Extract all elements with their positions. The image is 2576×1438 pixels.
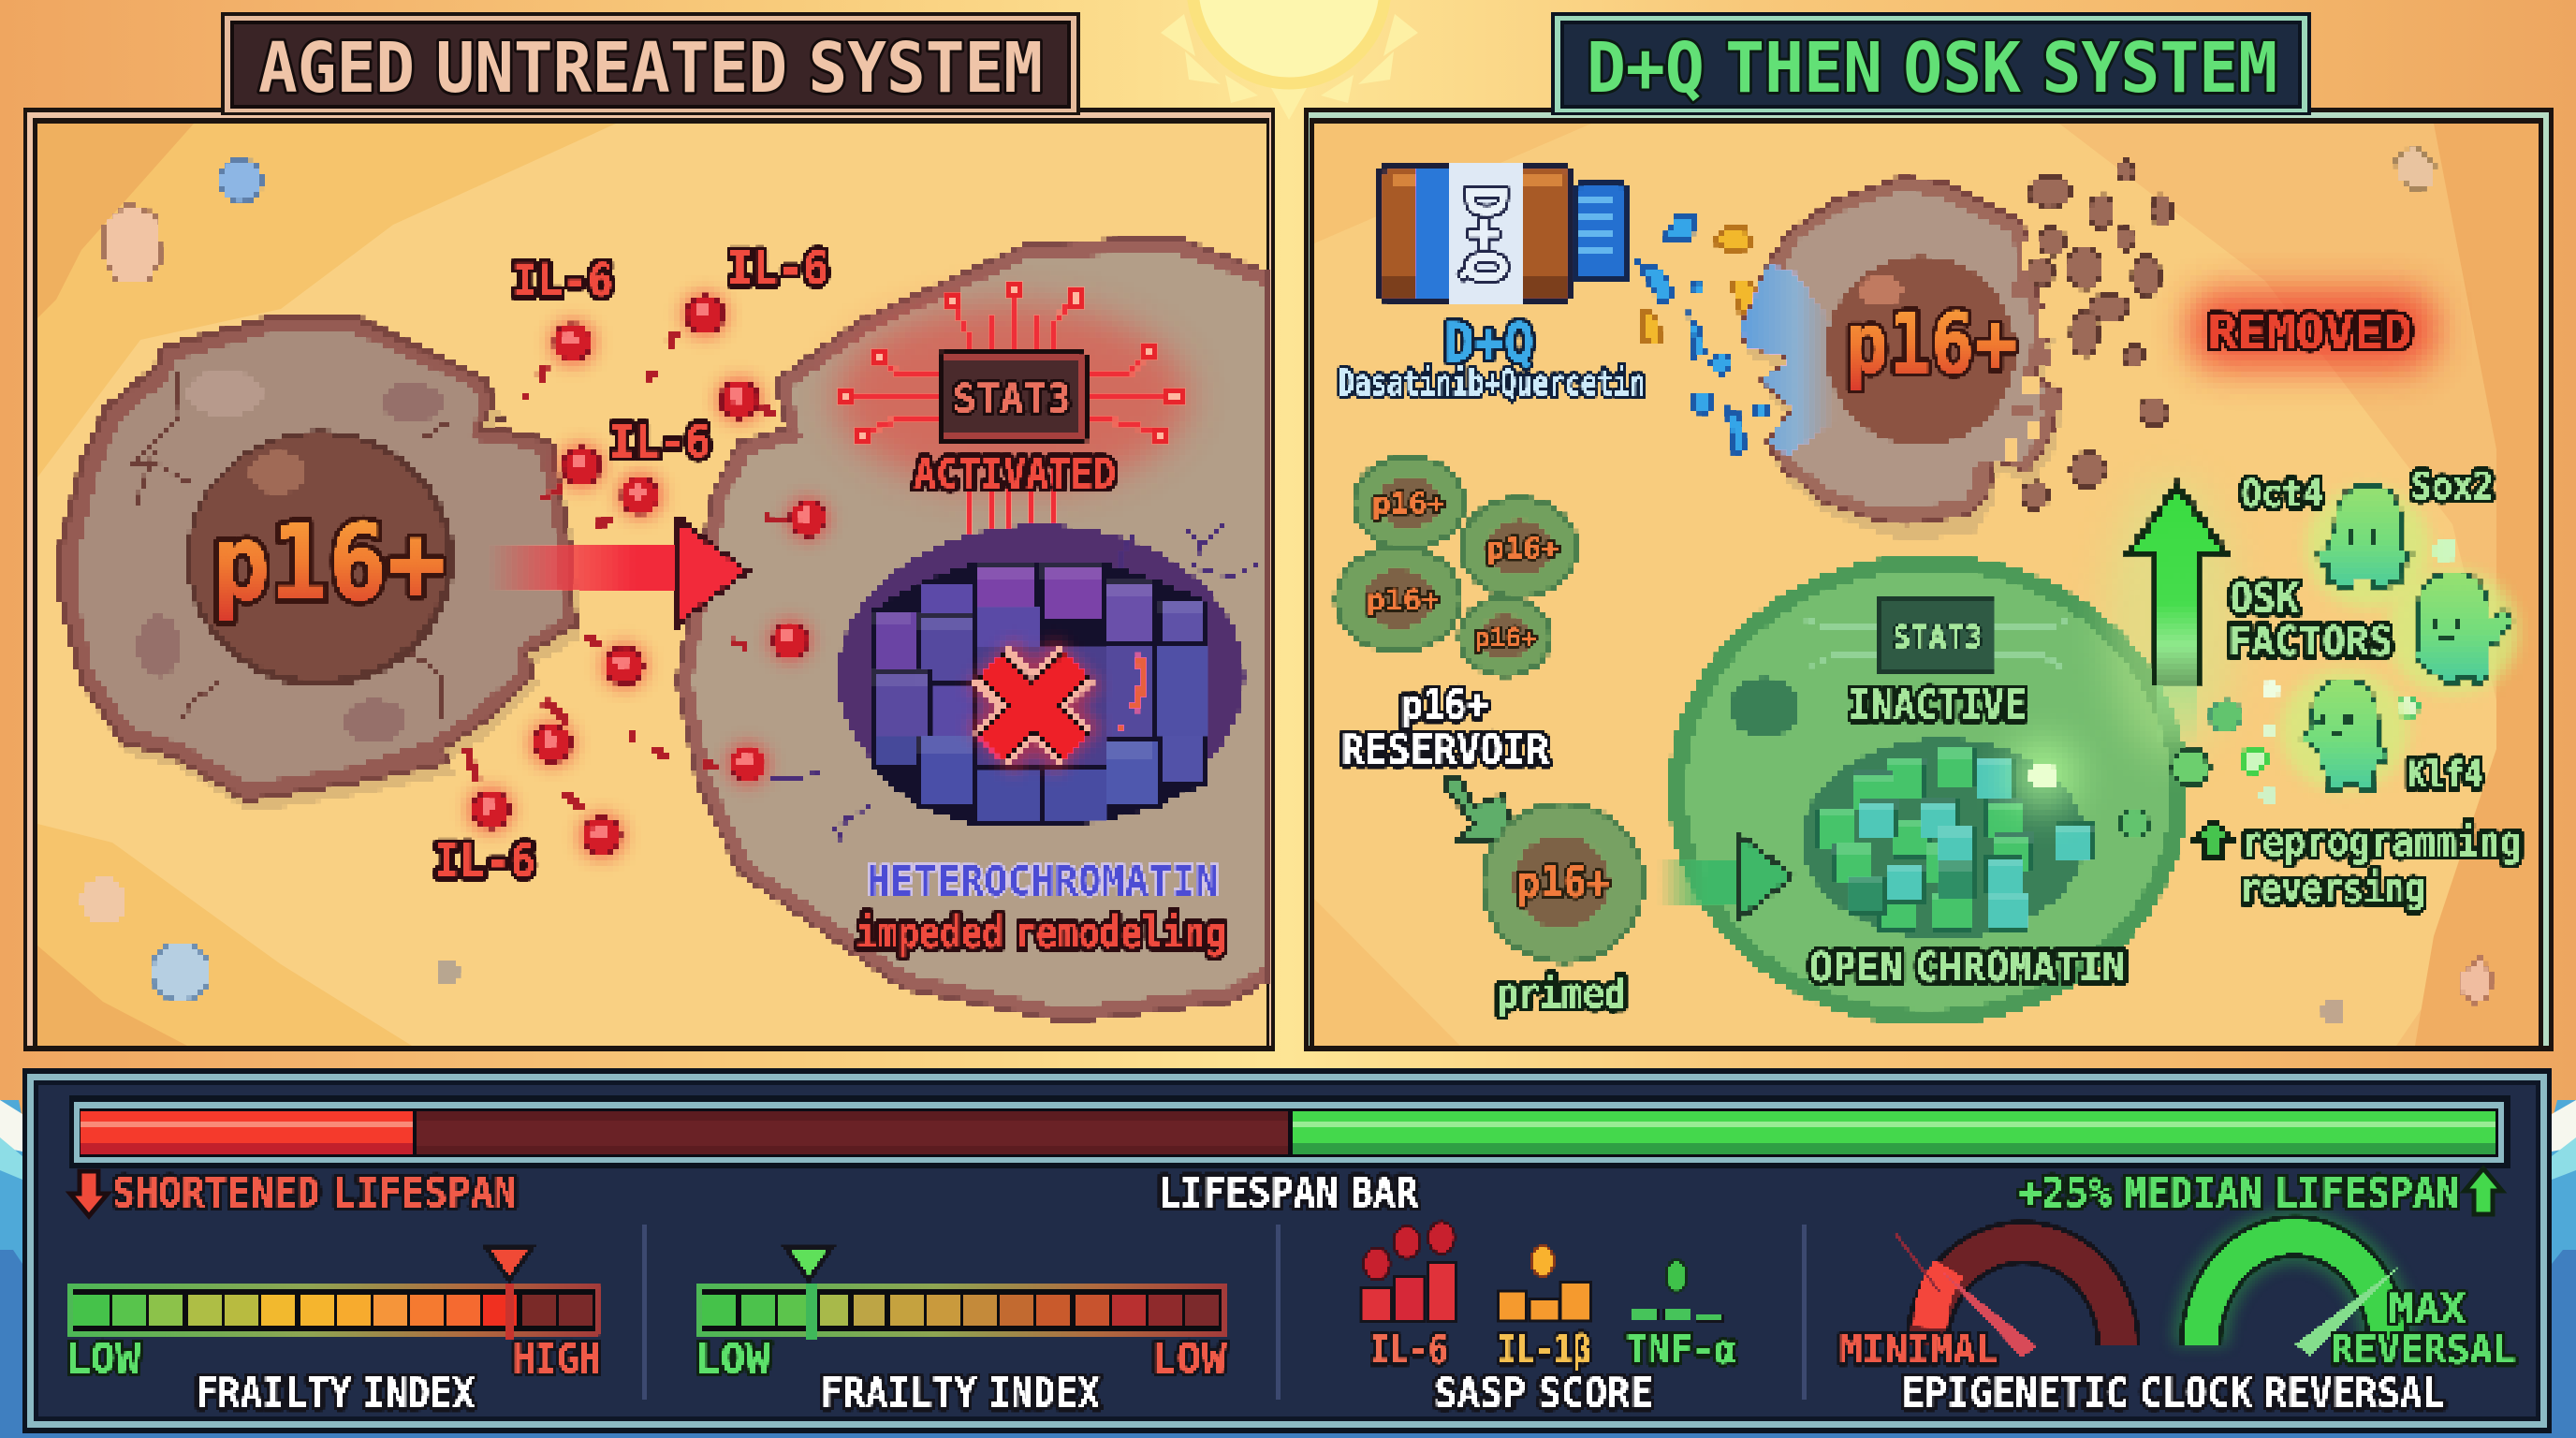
IL-6 label: IL-6 (609, 416, 710, 468)
up arrow (2465, 1168, 2502, 1214)
OSK blob Sox2 (2387, 570, 2518, 694)
IL-6 label: IL-6 (434, 835, 535, 888)
D+Q bottle (1375, 161, 1630, 304)
median lifespan gain: +25% MEDIAN LIFESPAN (2019, 1169, 2459, 1217)
green arrow to cell (1659, 834, 1793, 919)
senescent p16+ cell (62, 316, 580, 812)
IL-6 label: IL-6 (727, 242, 828, 295)
epigenetic clock reversal label: EPIGENETIC CLOCK REVERSAL (1902, 1370, 2445, 1417)
max label: MAX (2389, 1285, 2466, 1331)
art layer: right (1337, 146, 2518, 1025)
IL-6 bars (1362, 1222, 1456, 1322)
shells right (2322, 146, 2492, 1022)
gauge minimal (1895, 1234, 2118, 1357)
frailty index label: FRAILTY INDEX (821, 1370, 1100, 1417)
TNF-alpha label: TNF-α (1626, 1327, 1736, 1372)
Oct4 label: Oct4 (2241, 473, 2323, 516)
panel frame left with sand (23, 108, 1275, 1051)
removed label: REMOVED (2208, 305, 2412, 360)
cell debris (2022, 161, 2172, 508)
IL-6 label: IL-6 (512, 255, 613, 307)
Dasatinib+Quercetin: Dasatinib+Quercetin (1339, 362, 1646, 404)
primed cell (1484, 804, 1643, 961)
droplets (1640, 217, 1766, 455)
small cell label: p16+ (1372, 488, 1445, 521)
heterochromatin nucleus (772, 524, 1259, 843)
IL-6 label: IL-6 (1369, 1327, 1448, 1372)
shortened lifespan: SHORTENED LIFESPAN (112, 1169, 517, 1217)
Klf4 label: Klf4 (2408, 754, 2482, 797)
rejuvenated green cell (1669, 555, 2188, 1025)
reversing label: reversing (2240, 865, 2425, 913)
lifespan bar label: LIFESPAN BAR (1158, 1169, 1418, 1217)
low label: LOW (1151, 1335, 1226, 1383)
text layer: left (212, 242, 1226, 958)
text layer: right (1339, 184, 2522, 1018)
reprogramming arrow (2196, 820, 2232, 858)
text layer: dashboard (66, 1169, 2516, 1417)
dashboard frame (22, 1068, 2552, 1433)
title: D+Q then OSK system: D+Q THEN OSK SYSTEM (1587, 28, 2277, 109)
reservoir label line two: RESERVOIR (1341, 726, 1549, 774)
small cell label: p16+ (1367, 584, 1440, 617)
open chromatin label: OPEN CHROMATIN (1809, 944, 2126, 991)
lifespan bar (69, 1095, 2510, 1168)
primed cell label: p16+ (1516, 857, 1610, 907)
curved green arrow (1446, 777, 1510, 841)
low label: LOW (66, 1335, 140, 1383)
art layer: left (62, 160, 1266, 1021)
panel: D+Q then OSK system (1304, 12, 2554, 1051)
open chromatin blocks (1818, 749, 2093, 930)
dividers (642, 1225, 1807, 1400)
SASP score label: SASP SCORE (1434, 1370, 1653, 1417)
inactive chip label: STAT3 (1893, 619, 1983, 656)
neighbour cell with damaged membrane (678, 238, 1266, 1021)
minimal label: MINIMAL (1839, 1327, 1998, 1372)
disintegrating p16+ cell (1742, 178, 2063, 541)
low label: LOW (695, 1335, 770, 1383)
removed glow (2190, 292, 2434, 367)
OSK blob Klf4 (2281, 670, 2408, 790)
paracrine red arrow (487, 521, 748, 623)
shells left (81, 160, 459, 1000)
frailty gauge untreated (67, 1248, 600, 1339)
p16+ label: p16+ (212, 503, 446, 624)
OSK label: OSK (2230, 575, 2299, 623)
inactive label: INACTIVE (1849, 682, 2027, 729)
green upward arrow (2106, 477, 2237, 758)
p16+ reservoir cells (1337, 458, 1576, 675)
panel frame right with sand (1304, 108, 2554, 1051)
high label: HIGH (513, 1335, 601, 1383)
impeded remodeling label: impeded remodeling (856, 907, 1226, 958)
STAT3 chip label: STAT3 (953, 375, 1071, 421)
IL-6 droplets (466, 291, 831, 859)
SASP bar icons (1362, 1222, 1723, 1322)
title: aged untreated system: AGED UNTREATED SYSTEM (258, 28, 1043, 109)
frailty index label: FRAILTY INDEX (196, 1370, 475, 1417)
primed label: primed (1497, 970, 1626, 1018)
panel: bottom metrics dashboard (22, 1068, 2552, 1433)
down arrow (70, 1171, 108, 1216)
reversal label: REVERSAL (2331, 1327, 2516, 1372)
small cell label: p16+ (1486, 533, 1559, 565)
reprogramming label: reprogramming (2241, 818, 2522, 866)
frailty gauge treated (696, 1248, 1228, 1341)
bottle label D+Q: D+Q (1454, 184, 1517, 284)
activated label: ACTIVATED (914, 450, 1116, 498)
D+Q heading: D+Q (1444, 311, 1534, 374)
small cell label: p16+ (1474, 624, 1536, 653)
reservoir label line one: p16+ (1400, 682, 1488, 729)
IL-1 beta label: IL-1β (1498, 1327, 1591, 1372)
panel: aged untreated system (23, 12, 1275, 1051)
Sox2 label: Sox2 (2411, 465, 2494, 508)
TNF-alpha bars (1632, 1260, 1723, 1321)
OSK blob Oct4 (2306, 486, 2430, 608)
IL-1 beta bars (1498, 1246, 1590, 1320)
heterochromatin label: HETEROCHROMATIN (867, 858, 1219, 905)
dying cell p16+ label: p16+ (1845, 295, 2017, 393)
sparkles (2010, 539, 2456, 838)
STAT3 chip activated (834, 284, 1190, 571)
gauge max reversal (2201, 1237, 2403, 1356)
factors label: FACTORS (2228, 618, 2393, 666)
